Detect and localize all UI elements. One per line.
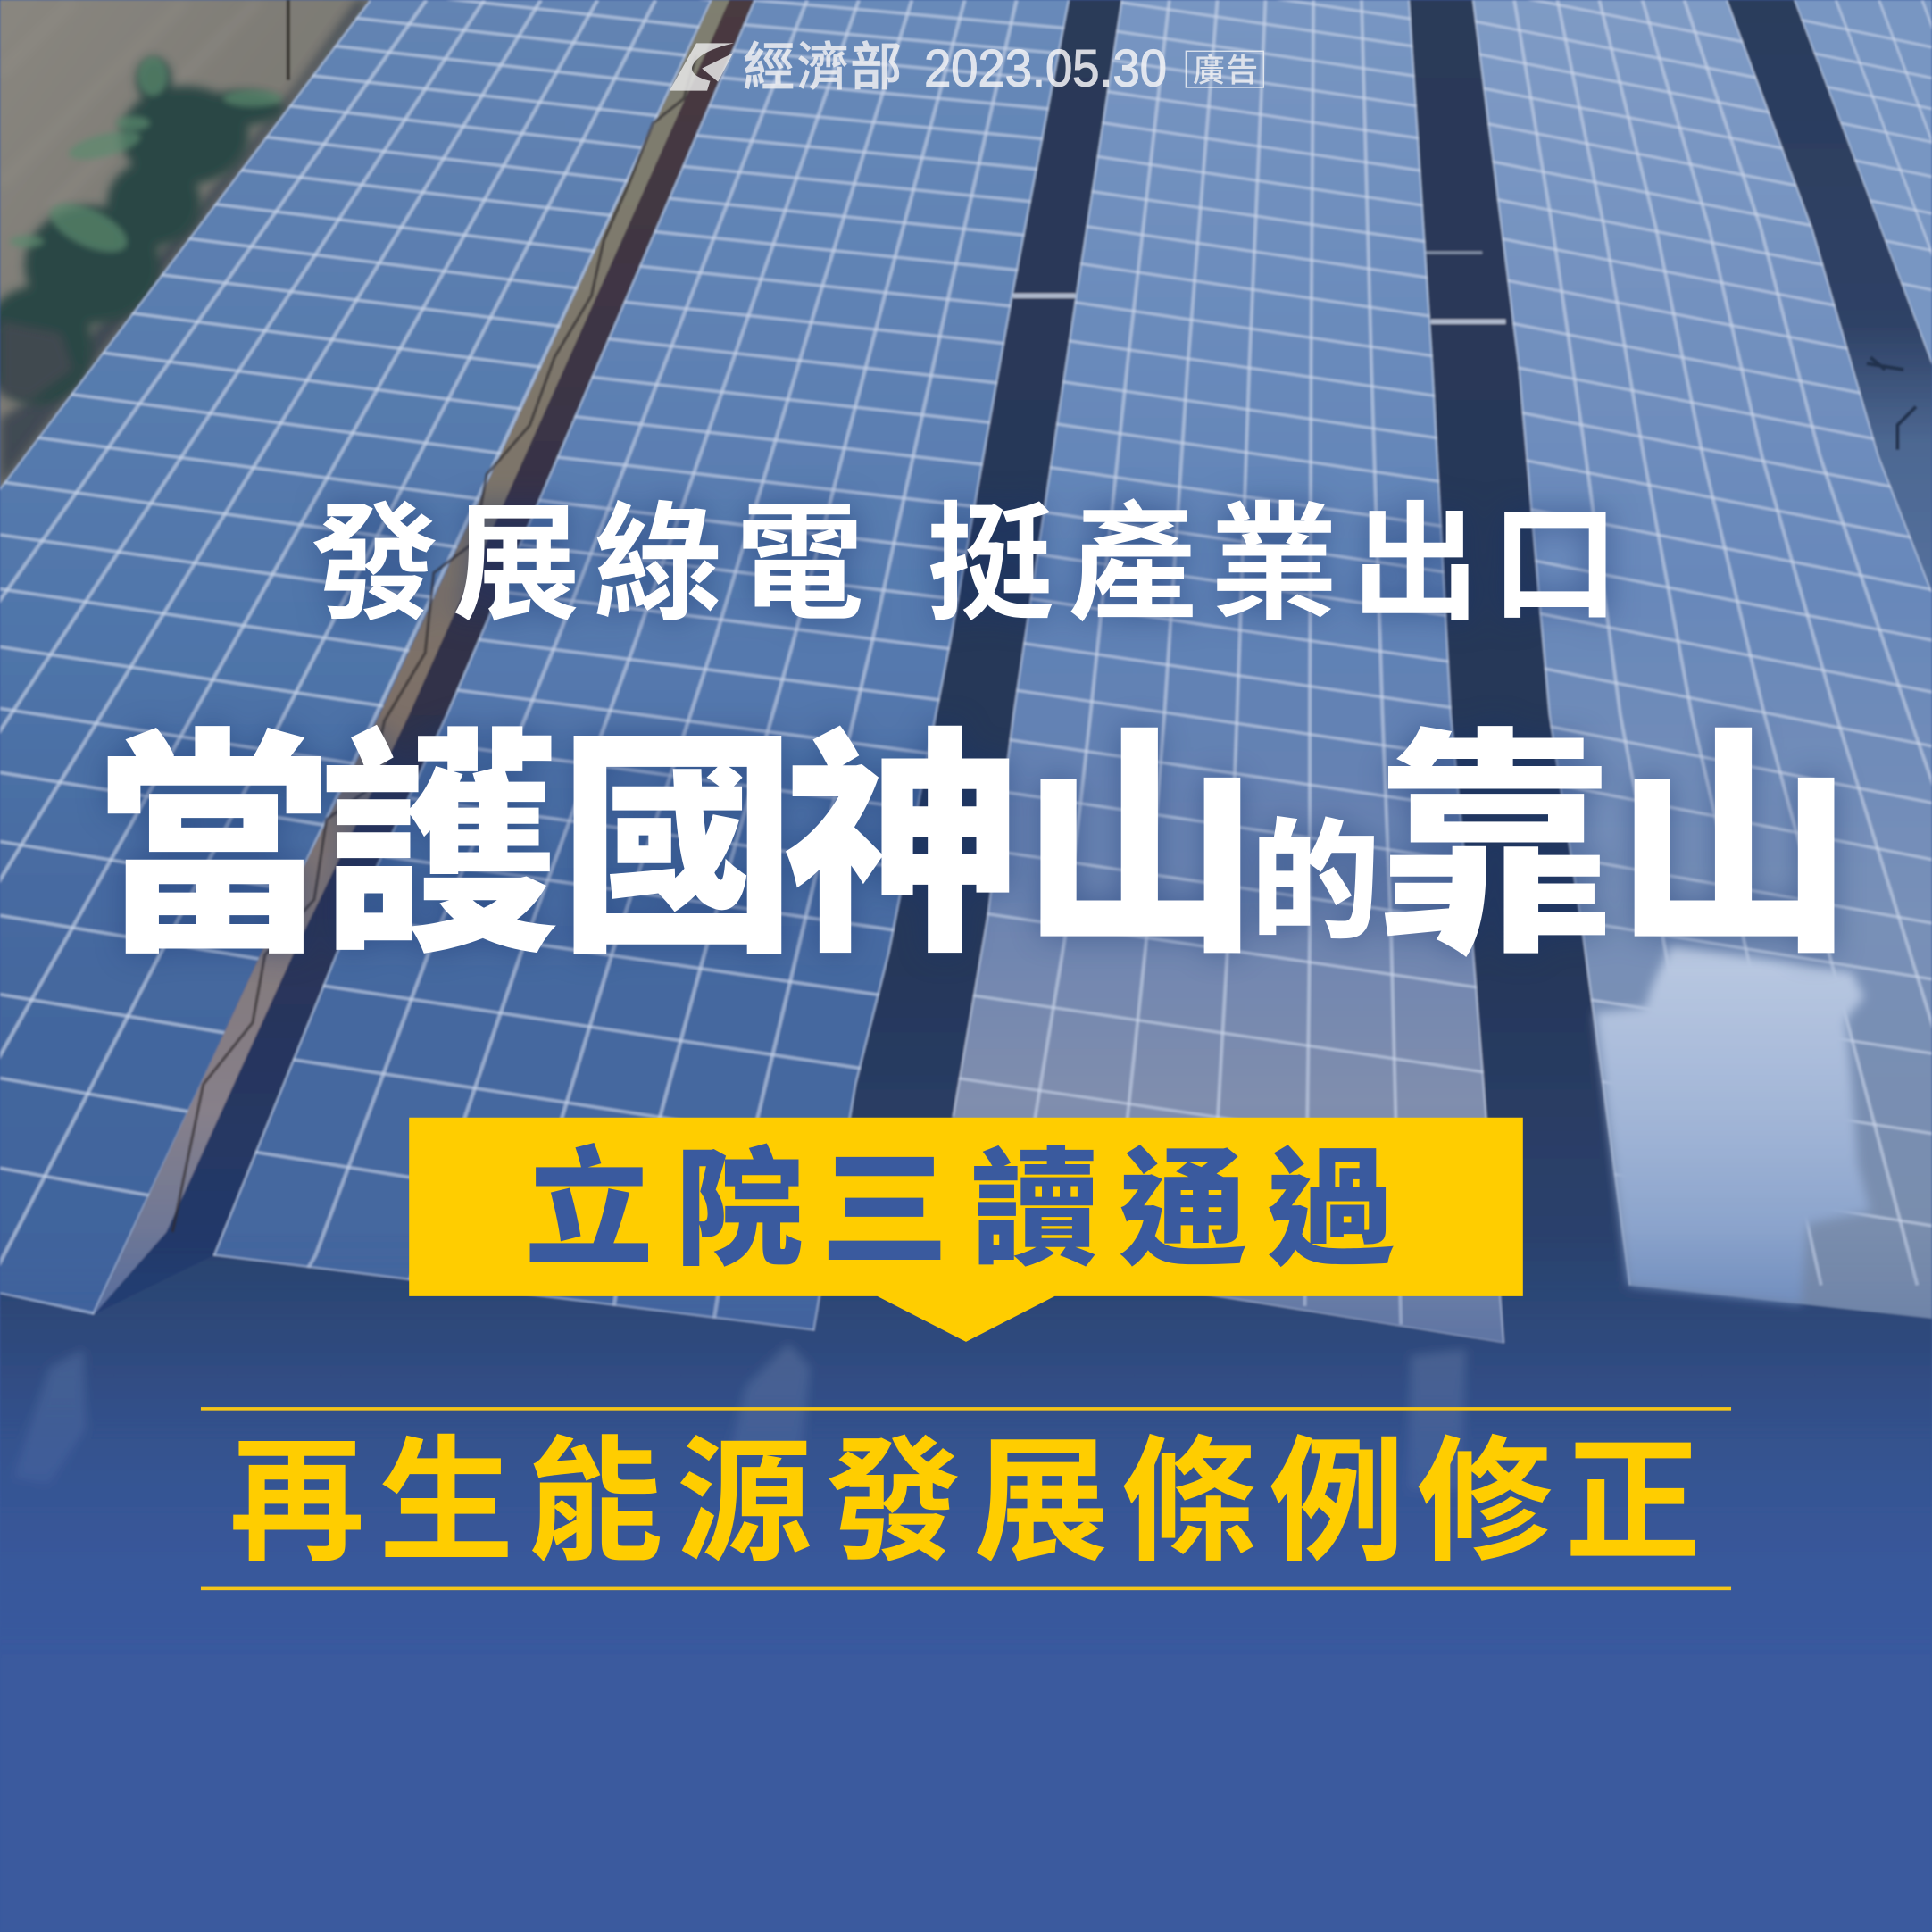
main title: 的 xyxy=(1251,810,1380,954)
callout: yellow banner with pointer xyxy=(409,1118,1523,1342)
gap between strips D and E xyxy=(1728,0,1932,591)
bill name with rules: 再生能源發展條例修正 xyxy=(229,1428,1701,1578)
gap between strips A and B xyxy=(94,0,754,1315)
reflection patch on strip D xyxy=(1595,945,1870,1303)
main title: 靠山 xyxy=(1375,714,1853,981)
strip B xyxy=(213,0,1109,1331)
icon: ministry logo xyxy=(670,43,734,91)
callout: yellow banner with pointer: 立院三讀通過 xyxy=(525,1139,1395,1282)
gap bars xyxy=(1012,253,1505,321)
ad tag: 廣告 xyxy=(1193,53,1258,88)
subtitle: 發展綠電 挺產業出口 xyxy=(311,494,1619,637)
background photo: solar panel rows xyxy=(0,0,1932,1507)
ground with tree xyxy=(0,0,370,488)
main title xyxy=(94,714,1853,981)
main title: 當護國神山 xyxy=(94,714,1259,981)
bottom fade to navy xyxy=(0,1232,1932,1657)
strip D xyxy=(1454,0,1932,1319)
ministry name: 經濟部 xyxy=(743,39,902,96)
strip C xyxy=(918,0,1516,1345)
support pillars under panels xyxy=(12,1343,1466,1491)
strip A xyxy=(0,0,712,1315)
date: 2023.05.30 xyxy=(924,41,1167,98)
header: ministry logo, date and ad tag xyxy=(670,39,1263,98)
strip E xyxy=(1794,0,1932,365)
